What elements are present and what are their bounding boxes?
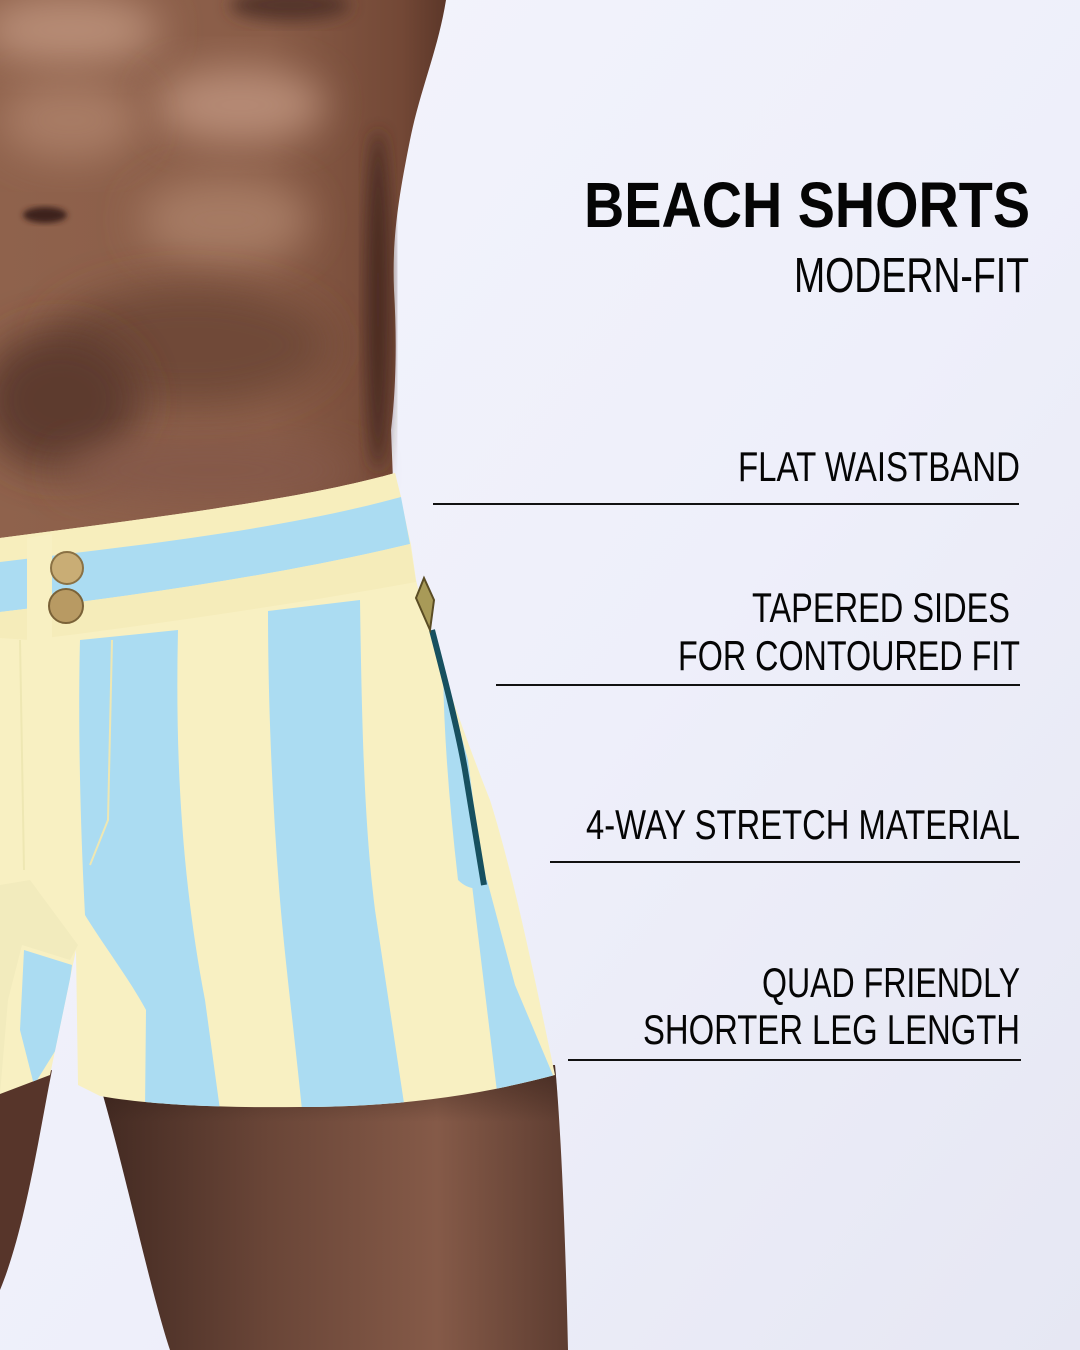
chest and muscle highlights [0, 0, 390, 498]
waistband buttons [49, 552, 83, 623]
waistband [0, 473, 416, 640]
fly placket [20, 640, 112, 870]
photo: model torso [0, 0, 446, 545]
feature: tapered sides: TAPERED SIDES [752, 584, 1010, 631]
feature: tapered sides [496, 584, 1020, 686]
photo: striped beach shorts [0, 473, 555, 1110]
zip pocket [416, 578, 484, 885]
feature: quad friendly [568, 959, 1021, 1061]
title [584, 169, 1030, 303]
photo: model legs [0, 1065, 568, 1350]
blue stripes [20, 600, 555, 1110]
